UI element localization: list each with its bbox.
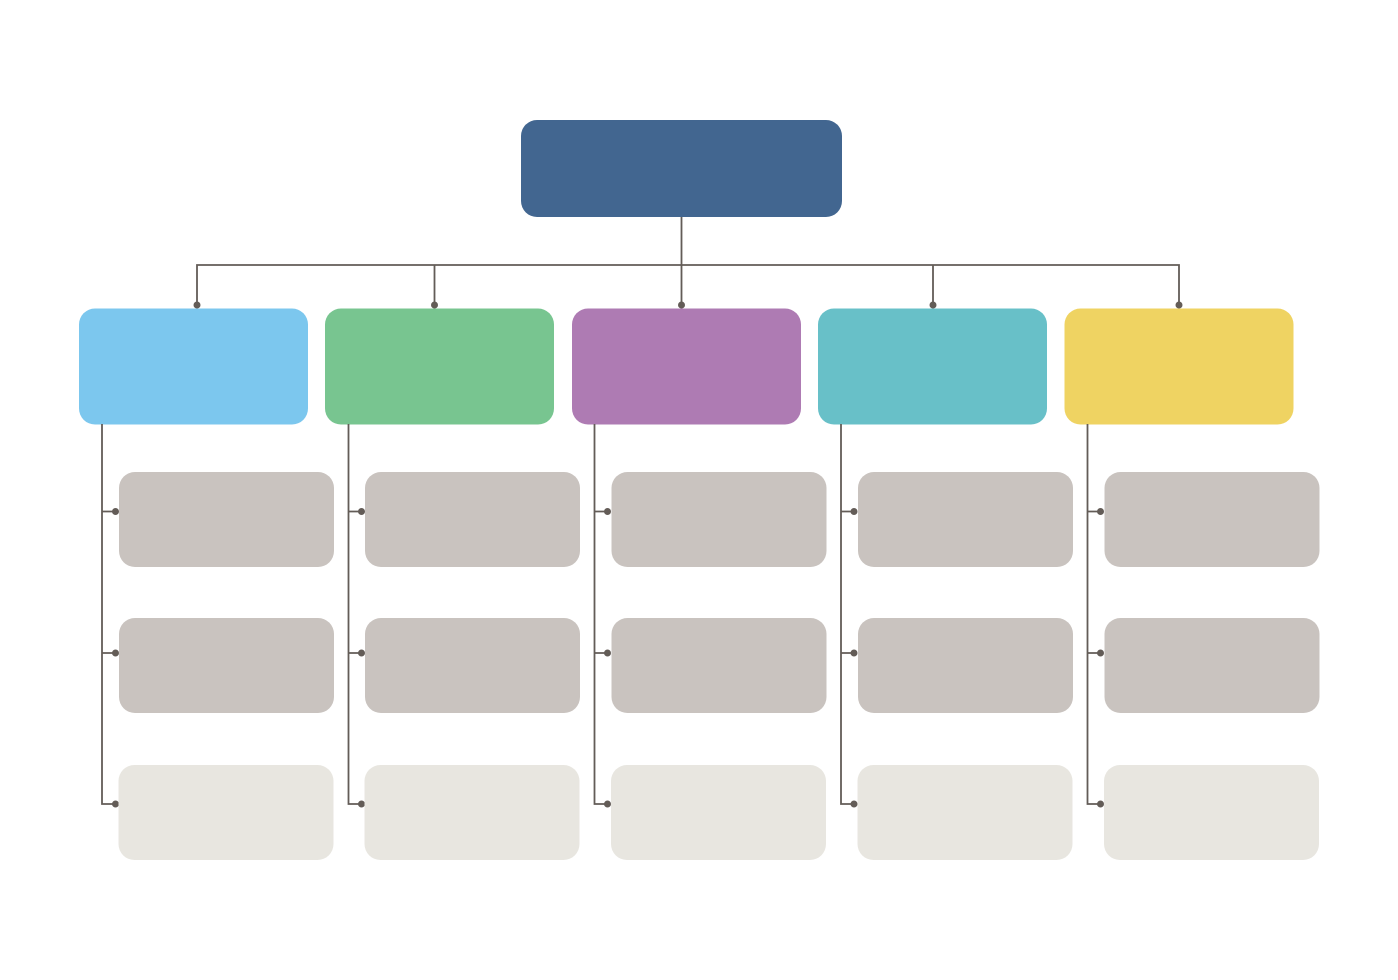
item box: column 3 row 3	[611, 765, 826, 860]
item box: column 3 row 1	[612, 472, 826, 567]
connector: column 4	[841, 424, 858, 808]
connector: top tree	[194, 217, 1182, 308]
column 1	[102, 424, 334, 860]
category box: purple	[572, 308, 801, 424]
item box: column 2 row 1	[365, 472, 580, 567]
column 4	[841, 424, 1073, 860]
category box: teal	[818, 308, 1047, 424]
item box: column 4 row 2	[858, 618, 1073, 713]
category box: yellow	[1064, 308, 1294, 424]
connector: column 2	[348, 424, 365, 808]
column 3	[594, 424, 826, 860]
connector: column 3	[594, 424, 611, 808]
item box: column 3 row 2	[612, 618, 826, 713]
category box: green	[325, 308, 554, 424]
column 5	[1088, 424, 1320, 860]
item box: column 5 row 2	[1104, 618, 1320, 713]
item box: column 2 row 3	[364, 765, 580, 860]
item box: column 2 row 2	[365, 618, 580, 713]
item box: column 5 row 3	[1104, 765, 1319, 860]
connector: column 1	[102, 424, 119, 808]
item box: column 4 row 3	[858, 765, 1072, 860]
item box: column 5 row 1	[1104, 472, 1320, 567]
item box: column 4 row 1	[858, 472, 1073, 567]
category box: blue	[79, 308, 308, 424]
item box: column 1 row 3	[118, 765, 334, 860]
connector: column 5	[1088, 424, 1104, 808]
item box: column 1 row 1	[119, 472, 334, 567]
root box	[521, 120, 842, 217]
column 2	[348, 424, 580, 860]
item box: column 1 row 2	[119, 618, 334, 713]
